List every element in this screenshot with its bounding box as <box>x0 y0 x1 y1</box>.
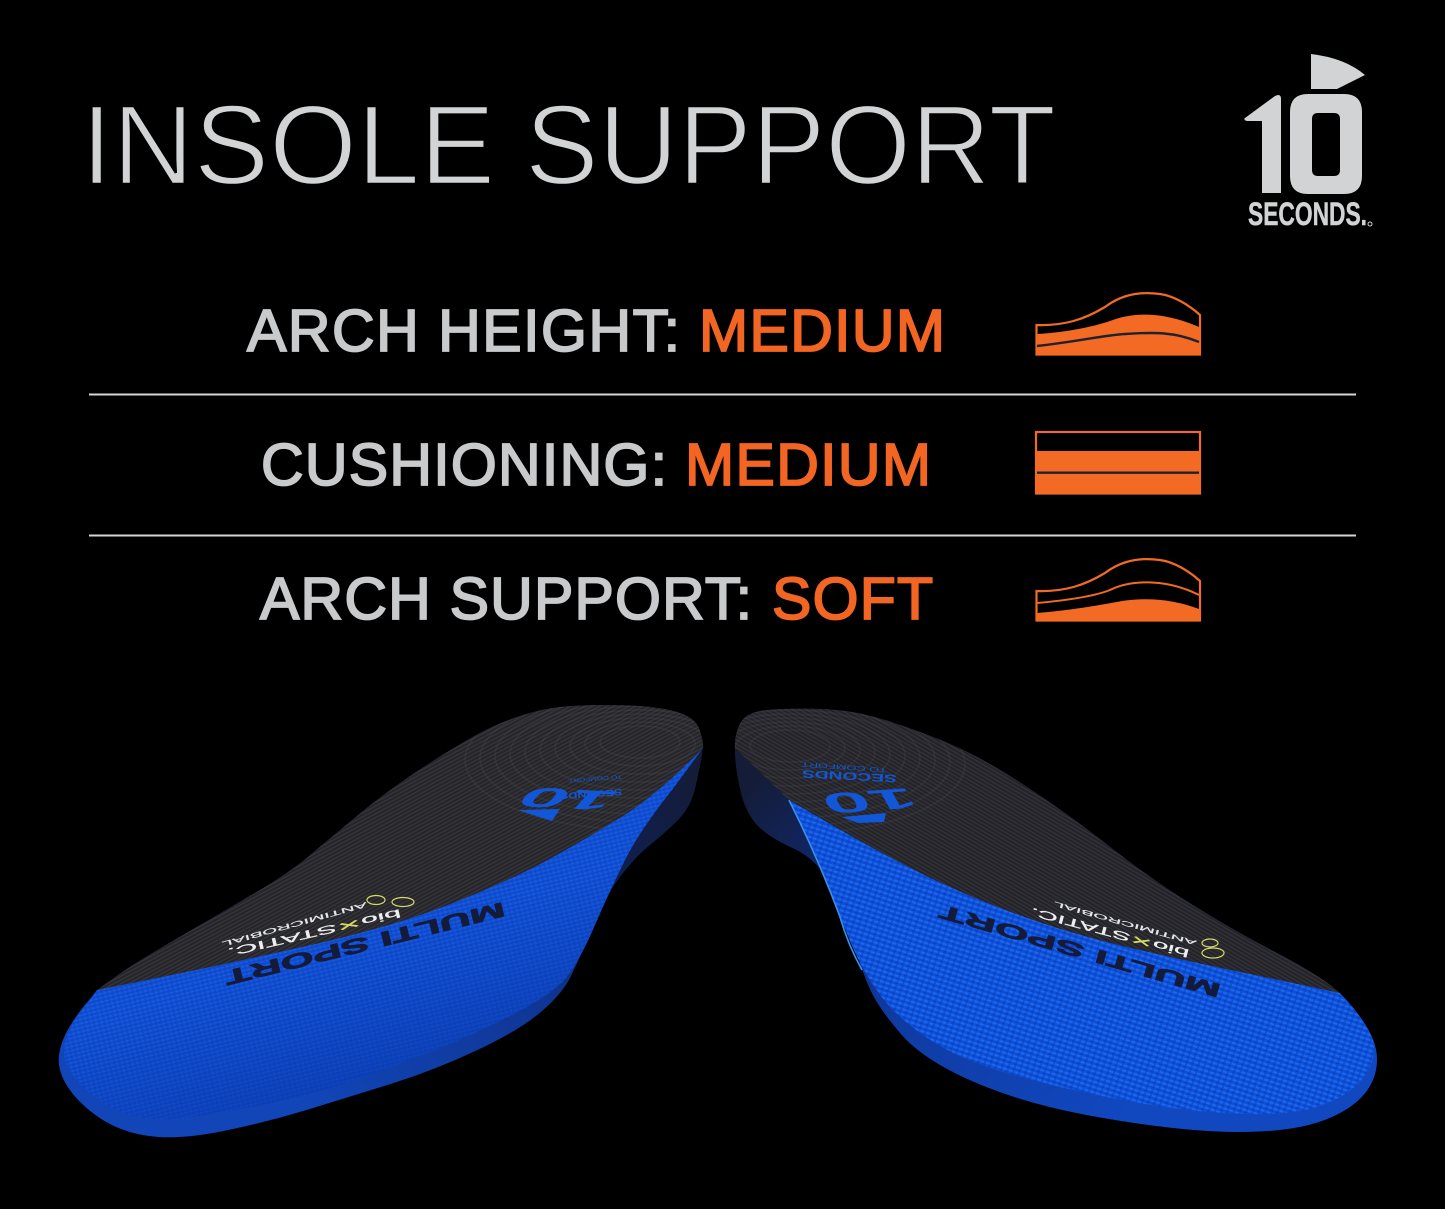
printed numeral 10: 10 <box>508 781 628 816</box>
insole side wall <box>735 709 1377 1132</box>
row: arch height <box>247 298 945 364</box>
icon: hexagons <box>1202 939 1224 958</box>
blue arch edge highlight <box>789 800 862 970</box>
printed 10 logo <box>508 774 628 821</box>
title word: INSOLE: INSOLE <box>81 82 495 208</box>
value: medium: MEDIUM <box>685 432 931 498</box>
logo shape: numeral 0 <box>1290 94 1362 194</box>
icon: arch height medium <box>1036 293 1200 354</box>
printed numeral 10: 10 <box>815 782 924 820</box>
printed MULTI SPORT: MULTI SPORT <box>936 900 1223 1001</box>
logo wordmark: SECONDS. <box>1248 196 1367 232</box>
title word: SUPPORT: SUPPORT <box>525 82 1056 208</box>
divider <box>89 394 1356 396</box>
logo: 10 Seconds <box>1244 54 1372 232</box>
insole blue forefoot <box>64 748 703 1120</box>
row: arch support <box>260 566 933 632</box>
heel contour bands <box>735 710 966 831</box>
printed SECONDS: SECONDS. <box>556 787 623 802</box>
heel contour bands <box>464 705 700 828</box>
value: medium: MEDIUM <box>699 298 945 364</box>
insole grey heel <box>97 705 703 990</box>
printed MULTI SPORT: MULTI SPORT <box>222 898 508 990</box>
insole blue forefoot <box>789 800 1374 1114</box>
printed SECONDS: SECONDS <box>802 767 897 784</box>
forefoot shading <box>64 860 625 1120</box>
printed bioSTATIC: bio✕STATIC. <box>226 906 402 958</box>
row: cushioning <box>261 432 931 498</box>
insole side wall <box>59 705 703 1137</box>
printed tagline: TO COMFORT. <box>799 760 887 774</box>
divider <box>89 534 1356 536</box>
printed arrowhead <box>842 813 886 823</box>
printed 10 logo <box>799 760 924 823</box>
icon: hexagons <box>367 896 414 906</box>
label: arch support: ARCH SUPPORT: <box>260 566 752 632</box>
printed arrowhead <box>518 809 560 821</box>
value: soft: SOFT <box>772 566 933 632</box>
insole grey heel <box>735 709 1340 993</box>
printed ANTIMICROBIAL: ANTIMICROBIAL <box>1052 899 1198 946</box>
printed ANTIMICROBIAL: ANTIMICROBIAL <box>221 900 367 947</box>
logo shape: numeral 1 <box>1244 95 1281 193</box>
label: arch height: ARCH HEIGHT: <box>247 298 680 364</box>
icon: arch support soft <box>1036 559 1200 620</box>
registered mark <box>1368 222 1372 226</box>
title <box>81 82 1056 208</box>
printed bioSTATIC: bio✕STATIC. <box>1029 905 1191 959</box>
insole: right <box>734 708 1377 1132</box>
label: cushioning: CUSHIONING: <box>261 432 667 498</box>
insole: left <box>58 705 704 1138</box>
icon: cushioning medium <box>1036 432 1200 494</box>
logo shape: arrowhead <box>1311 54 1365 89</box>
printed tagline: TO COMFORT. <box>567 774 622 784</box>
